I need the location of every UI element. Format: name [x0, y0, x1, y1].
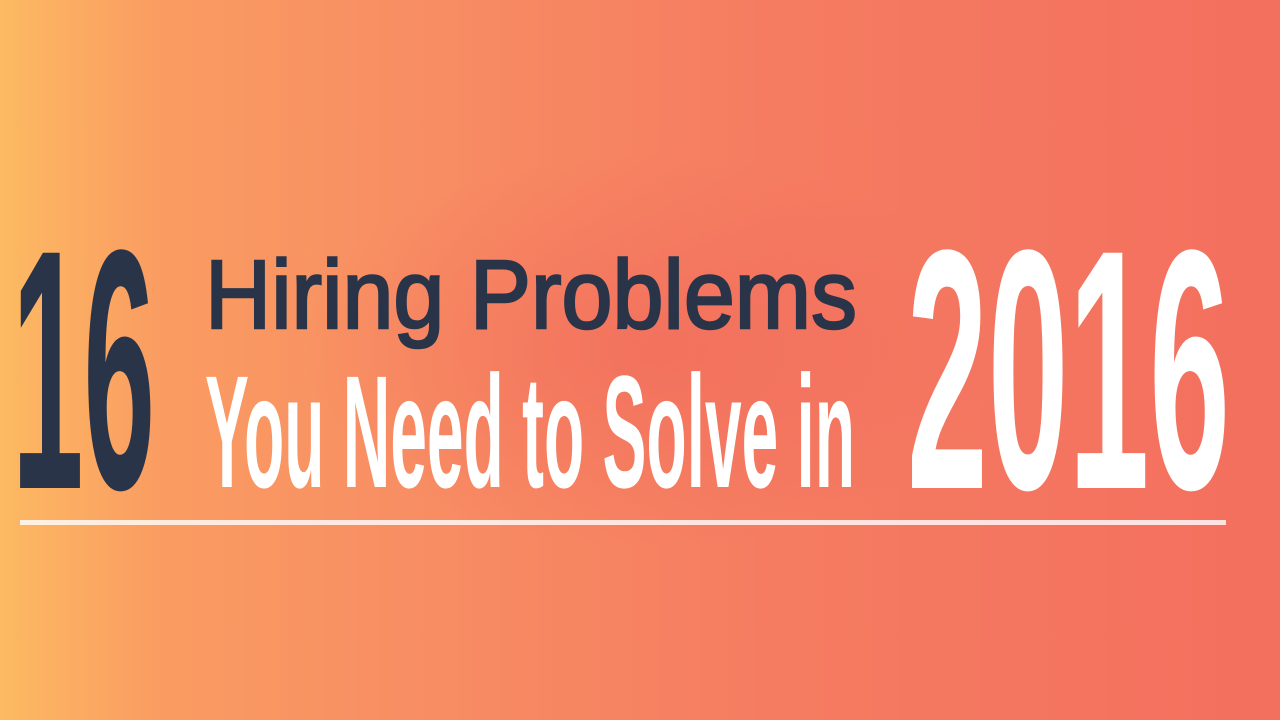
text: 16 — [12, 179, 155, 561]
heading line 1: Hiring Problems: Hiring Problems — [205, 240, 857, 349]
divider line — [20, 520, 1226, 525]
